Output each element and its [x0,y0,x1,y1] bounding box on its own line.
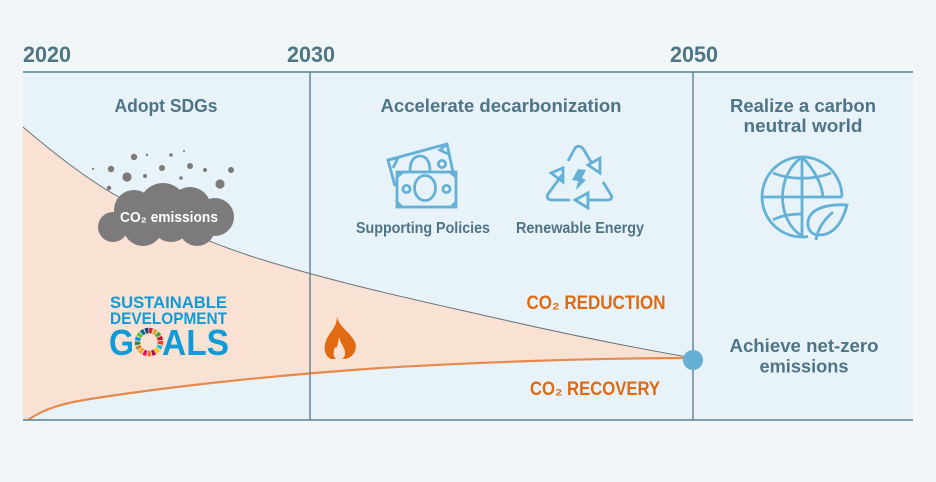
heading: Realize a carbon neutral world: neutral world [744,115,862,136]
year label: 2020: 2020 [23,42,71,67]
icon: globe with leaf [762,157,847,240]
heading: Realize a carbon neutral world: Realize a carbon [730,95,876,116]
label: CO2 reduction: CO₂ REDUCTION [526,293,666,314]
icon: CO2 emission cloud with particles [92,150,234,246]
label: Renewable Energy: Renewable Energy [516,220,644,237]
label: Achieve net-zero emissions: Achieve net-zero [730,336,879,356]
label: CO2 emissions: CO₂ emissions [120,210,218,226]
label: Achieve net-zero emissions: emissions [760,356,848,376]
logo: Sustainable Development Goals: DEVELOPMENT [110,309,228,328]
label: Supporting Policies: Supporting Policies [356,220,490,237]
logo: Sustainable Development Goals: G [109,322,134,363]
panel: timeline background [23,72,913,420]
year label: 2050: 2050 [670,42,718,67]
marker: net-zero point [683,350,703,370]
icon: SDG colour wheel [138,330,160,354]
icon: banknotes [388,144,456,207]
label: CO2 recovery: CO₂ RECOVERY [530,379,660,400]
label: Achieve net-zero emissions [730,336,879,376]
chart: CO2 recovery curve [28,358,693,420]
chart: CO2 wedge area [23,127,693,420]
heading: Realize a carbon neutral world [730,95,876,136]
chart: CO2 emissions curve [23,127,693,358]
logo: Sustainable Development Goals: SUSTAINABLE [110,293,227,312]
heading: Adopt SDGs: Adopt SDGs [114,95,218,116]
icon: flame [325,316,356,359]
timeline axis lines [23,72,913,420]
year label: 2030: 2030 [287,42,335,67]
logo: Sustainable Development Goals: ALS [162,322,229,363]
heading: Accelerate decarbonization: Accelerate decarbonization [380,95,622,116]
icon: renewable energy recycle arrows [547,146,612,208]
logo: Sustainable Development Goals [109,293,229,363]
